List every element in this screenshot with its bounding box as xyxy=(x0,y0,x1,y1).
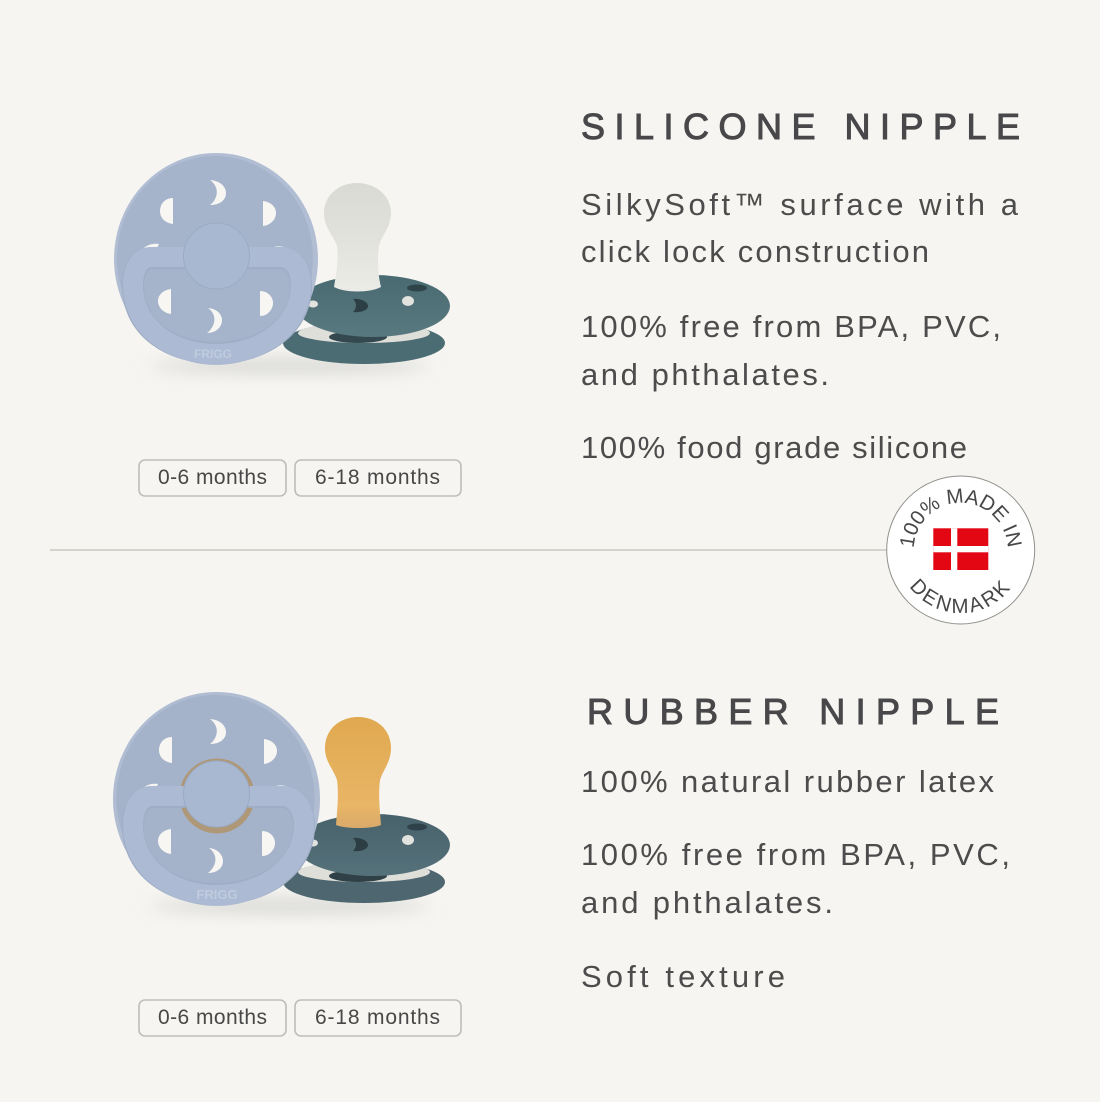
curved label bottom: DENMARK xyxy=(910,578,1010,613)
back pacifier: teal shield xyxy=(296,275,450,337)
handle ring shadow xyxy=(133,797,304,894)
front pacifier: blue shield xyxy=(114,153,318,365)
embossed brand: FRIGG xyxy=(194,347,232,361)
badge: 100% made in Denmark xyxy=(886,476,1036,624)
centre button xyxy=(184,223,250,289)
text block: silicone features: click lock construction xyxy=(581,234,929,269)
moon-shaped vents xyxy=(141,719,295,873)
text block: silicone features: SilkySoft™ surface with a xyxy=(581,187,1019,222)
back pacifier: teal lower ring xyxy=(283,322,445,364)
panel: rubber nipple xyxy=(113,691,1010,1036)
panel: silicone nipple xyxy=(114,106,1020,496)
text block: rubber features: 100% free from BPA, PVC, xyxy=(581,837,1010,872)
text block: silicone features: 100% food grade silicone xyxy=(581,430,967,465)
product photo: silicone pacifiers xyxy=(114,153,450,373)
text block: rubber features xyxy=(581,764,1010,994)
handle ring xyxy=(133,257,301,354)
size pill: 6-18 months xyxy=(295,1000,461,1036)
size pill: 0-6 months xyxy=(139,1000,286,1036)
front pacifier: blue shield xyxy=(113,692,320,906)
shadow xyxy=(150,359,430,373)
centre button xyxy=(184,761,250,827)
rubber nipple xyxy=(325,717,391,828)
size pill: 6-18 months xyxy=(295,460,461,496)
size pill: 0-6 months xyxy=(139,460,286,496)
size pill: 6-18 months: 6-18 months xyxy=(315,466,440,489)
heading: silicone nipple: SILICONE NIPPLE xyxy=(581,106,1020,147)
text block: rubber features: and phthalates. xyxy=(581,885,833,920)
size pill: 0-6 months: 0-6 months xyxy=(158,466,267,489)
curved label top: 100% MADE IN xyxy=(900,488,1022,547)
shadow xyxy=(150,899,430,913)
text block: silicone features: 100% free from BPA, PVC, xyxy=(581,309,1001,344)
product photo: rubber pacifiers xyxy=(113,692,450,913)
text block: rubber features: 100% natural rubber latex xyxy=(581,764,994,799)
text block: rubber features: Soft texture xyxy=(581,959,785,994)
text block: silicone features: and phthalates. xyxy=(581,357,829,392)
silicone nipple xyxy=(324,183,391,292)
heading: rubber nipple: RUBBER NIPPLE xyxy=(587,691,999,732)
handle ring shadow xyxy=(133,258,301,353)
text block: silicone features xyxy=(581,187,1019,465)
rubber ring behind button xyxy=(180,758,254,834)
back pacifier: slate shield xyxy=(296,814,450,876)
moon-shaped vents xyxy=(142,180,293,333)
icon: Danish flag xyxy=(933,528,988,570)
size pill: 6-18 months: 6-18 months xyxy=(315,1006,440,1029)
size pill: 0-6 months: 0-6 months xyxy=(158,1006,267,1029)
embossed brand: FRIGG xyxy=(196,887,238,902)
handle ring xyxy=(133,796,304,895)
back pacifier: slate lower ring xyxy=(283,861,445,903)
